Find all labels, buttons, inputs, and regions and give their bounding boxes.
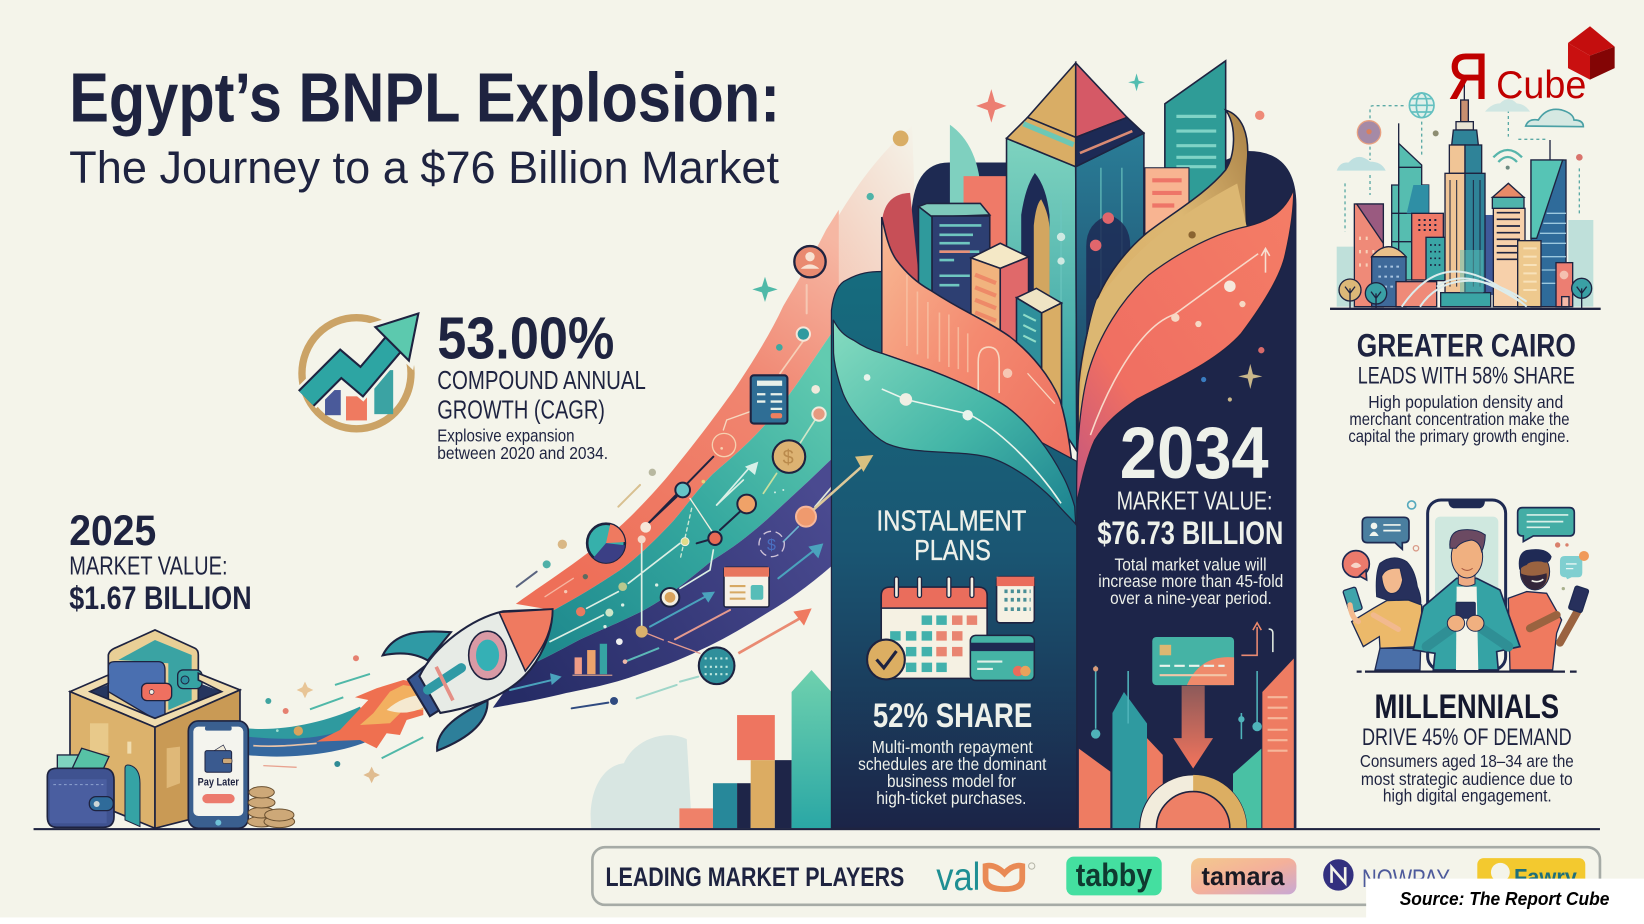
logo word: Cube xyxy=(1496,64,1586,107)
central tower panel xyxy=(814,61,1296,882)
people illustration xyxy=(1343,500,1589,672)
tower light lines xyxy=(1061,168,1122,419)
title: Egypt’s BNPL Explosion: xyxy=(69,59,780,137)
bottom bar chart xyxy=(591,670,831,828)
stat: 2025: MARKET VALUE: xyxy=(69,551,228,581)
stat: 2034: 2034 xyxy=(1120,412,1269,494)
dome building xyxy=(1372,247,1406,307)
coin stack xyxy=(248,787,295,828)
icon: check badge xyxy=(867,640,905,679)
red cube xyxy=(1568,26,1615,80)
logo: valU xyxy=(936,856,1035,899)
bearded man xyxy=(1508,549,1589,670)
half gauge xyxy=(1139,774,1248,828)
market players bar xyxy=(592,847,1600,905)
logo: tamara: tamara xyxy=(1202,861,1285,891)
woman xyxy=(1343,558,1422,670)
stat: instalment plans: high-ticket purchases. xyxy=(876,788,1026,808)
navy right panel xyxy=(1077,151,1296,828)
lower trail nodes xyxy=(576,483,816,645)
rocket window xyxy=(469,631,506,679)
central skyscraper xyxy=(1445,80,1485,293)
upper nodes xyxy=(649,327,826,493)
icon: card in right panel xyxy=(1152,637,1234,685)
exhaust dashes xyxy=(310,674,423,758)
logo: fawry: Fawry xyxy=(1514,864,1577,890)
icon: mesh globe xyxy=(699,647,734,684)
stat: Greater Cairo: LEADS WITH 58% SHARE xyxy=(1358,362,1575,389)
stat: CAGR xyxy=(437,305,646,463)
stat: instalment plans: PLANS xyxy=(914,534,991,566)
bearded man phone xyxy=(1568,586,1589,613)
tower left face xyxy=(1007,138,1077,451)
wallet in box xyxy=(108,630,202,719)
exhaust: blue stream xyxy=(247,733,377,757)
blue back block xyxy=(1485,215,1493,295)
tower sparkles xyxy=(867,73,1264,402)
central man jacket xyxy=(1413,578,1520,670)
icon: dollar coin xyxy=(773,440,805,473)
stat: CAGR: Explosive expansion xyxy=(437,425,575,445)
stat: Greater Cairo: merchant concentration make the xyxy=(1349,409,1570,429)
navy band xyxy=(493,457,839,708)
button xyxy=(202,794,235,803)
stat: CAGR: 53.00% xyxy=(437,305,614,372)
connection lines xyxy=(1345,106,1579,232)
tower right face xyxy=(1076,133,1144,451)
plaza blocks xyxy=(1396,250,1491,307)
icon bars xyxy=(325,370,393,420)
people ground line xyxy=(1357,668,1577,675)
small teal gold building xyxy=(1016,288,1062,404)
tower pyramid coral xyxy=(1076,63,1127,137)
stat: 2034: $76.73 BILLION xyxy=(1097,515,1283,551)
stat: instalment plans xyxy=(858,504,1047,808)
teal block xyxy=(1426,237,1445,281)
icon: wifi xyxy=(1493,150,1522,170)
rocket upper fin xyxy=(383,631,451,661)
rocket side strut xyxy=(428,668,461,690)
teal right tower xyxy=(1165,61,1226,231)
rocket nozzle xyxy=(408,661,461,716)
rising arrow xyxy=(306,313,418,398)
logo letter: Я xyxy=(1448,40,1489,113)
skyline base line xyxy=(1330,308,1601,310)
logo: tabby: tabby xyxy=(1076,857,1152,893)
coral triangle building xyxy=(1354,204,1383,307)
logo: fawry xyxy=(1477,858,1585,894)
bearded man beard xyxy=(1521,573,1547,590)
phone backdrop xyxy=(1428,500,1506,670)
woman hands xyxy=(1350,605,1398,629)
stat: 2034: over a nine-year period. xyxy=(1110,588,1272,608)
small floating dots xyxy=(1408,501,1569,590)
rocket xyxy=(383,609,553,751)
gold-roof building xyxy=(1492,183,1525,307)
central man arms xyxy=(1427,627,1508,647)
tower arch xyxy=(1021,173,1050,362)
stat: Millennials: Consumers aged 18–34 are the xyxy=(1360,751,1574,771)
stat: CAGR: GROWTH (CAGR) xyxy=(437,394,605,424)
icon: globe xyxy=(1409,93,1434,118)
sparkle: mint xyxy=(752,277,778,302)
stat: Millennials xyxy=(1360,688,1574,806)
rocket tail stripe xyxy=(436,667,453,700)
coral band xyxy=(516,210,839,610)
central man phone xyxy=(1456,602,1475,618)
dots xyxy=(1433,130,1583,161)
stat: instalment plans: Multi-month repayment xyxy=(872,737,1033,757)
bearded man hair xyxy=(1519,549,1552,570)
white arrow head xyxy=(745,462,758,475)
coral small building xyxy=(1556,263,1573,307)
city skyline xyxy=(1330,80,1601,310)
stat: Greater Cairo: High population density and xyxy=(1368,392,1563,412)
stat: instalment plans: business model for xyxy=(887,771,1016,791)
stat: instalment plans: INSTALMENT xyxy=(877,504,1026,536)
trail chart upper section xyxy=(648,246,826,523)
blue arrow heads xyxy=(550,543,823,685)
bearded man head xyxy=(1520,553,1550,590)
stat: 2034: increase more than 45-fold xyxy=(1098,571,1283,591)
tower dark window arch xyxy=(1086,215,1130,356)
stat: Millennials: high digital engagement. xyxy=(1383,786,1552,806)
faint peach trail glow xyxy=(786,126,917,336)
arrow: gold rising into panel xyxy=(814,455,873,510)
bearded man arm xyxy=(1530,610,1578,643)
coral block xyxy=(1412,213,1443,280)
small wallet xyxy=(47,768,114,827)
icon: document xyxy=(751,375,787,424)
box left face xyxy=(70,692,155,828)
icon: credit card xyxy=(970,635,1034,680)
rocket lower fin xyxy=(437,700,488,751)
logo: tamara xyxy=(1191,858,1296,894)
central man hair xyxy=(1450,530,1485,552)
back navy arch xyxy=(911,163,1090,419)
source text: Source: The Report Cube xyxy=(1400,888,1609,909)
teal band xyxy=(519,330,839,671)
woman hair xyxy=(1376,558,1421,605)
cloud backdrop xyxy=(591,735,692,828)
mint back tower xyxy=(950,125,981,252)
icon: user badge xyxy=(794,246,826,277)
stat: CAGR: between 2020 and 2034. xyxy=(437,443,608,463)
logo: valU: val xyxy=(936,856,980,899)
speech bubble mint xyxy=(1518,508,1574,542)
lower trail dots xyxy=(543,480,705,705)
stat: Greater Cairo xyxy=(1348,327,1576,446)
exhaust details xyxy=(253,726,317,746)
stat: 2034 xyxy=(1097,412,1283,608)
ground line xyxy=(34,828,1600,830)
box details xyxy=(90,723,180,827)
woman jeans xyxy=(1375,648,1421,670)
central man xyxy=(1413,530,1520,670)
rocket nose cone xyxy=(499,609,553,671)
bar heading: LEADING MARKET PLAYERS xyxy=(605,861,904,892)
rocket body xyxy=(419,609,553,713)
stat: CAGR: COMPOUND ANNUAL xyxy=(437,365,646,395)
central man hands xyxy=(1447,615,1484,631)
stat: Millennials: DRIVE 45% OF DEMAND xyxy=(1362,724,1572,751)
upper trail lines xyxy=(648,285,815,523)
navy building left xyxy=(918,203,990,331)
icon: location pin xyxy=(1357,121,1381,144)
peach building xyxy=(1145,168,1189,246)
icon: calendar lock xyxy=(724,567,769,607)
woman torso xyxy=(1352,600,1422,648)
lower trail lines xyxy=(510,480,835,708)
exhaust: teal stream xyxy=(247,707,373,750)
CAGR icon xyxy=(302,313,418,429)
box interior xyxy=(90,667,222,718)
central man face xyxy=(1462,568,1473,570)
woman phone xyxy=(1343,587,1363,613)
exhaust pink dash xyxy=(263,766,297,767)
phone: Pay Later xyxy=(188,721,248,828)
dashed dollar coin: $ xyxy=(767,537,776,554)
main tower xyxy=(1007,63,1144,451)
mint glass tower xyxy=(1392,123,1429,280)
woman face xyxy=(1382,568,1403,593)
bar outline xyxy=(592,847,1600,905)
central man head xyxy=(1451,535,1483,578)
left teal panel xyxy=(831,272,1077,828)
mini wallet xyxy=(205,745,232,772)
coral back building xyxy=(964,176,1008,260)
rust back panel xyxy=(882,193,923,315)
stat: 2025: 2025 xyxy=(69,507,156,555)
journey trail: ribbon from rocket to tower xyxy=(493,126,917,708)
tower collar left xyxy=(1007,117,1076,167)
arrow: down into gauge xyxy=(1173,686,1213,769)
right coral ribbon xyxy=(1077,189,1294,503)
stat: 2025: $1.67 BILLION xyxy=(69,580,252,616)
cream building xyxy=(971,243,1029,362)
stat: 2025 xyxy=(69,507,252,616)
stat: Millennials: MILLENNIALS xyxy=(1375,688,1559,726)
speech bubble blue xyxy=(1362,517,1409,549)
left coral ribbon xyxy=(882,217,1075,506)
bearded man shirt xyxy=(1508,592,1562,670)
faint background blocks xyxy=(1337,220,1593,307)
icon: small calendar xyxy=(997,577,1034,623)
exhaust dots and sparkles xyxy=(265,655,380,783)
logo: NOWPAY xyxy=(1323,859,1450,893)
stat: instalment plans: schedules are the dominant xyxy=(858,754,1047,774)
flame xyxy=(317,680,425,748)
stat: Greater Cairo: capital the primary growth engine. xyxy=(1348,426,1570,446)
base cityscape: right panel xyxy=(1079,658,1294,828)
gold building xyxy=(1518,241,1541,307)
gold ribbon xyxy=(1078,110,1248,451)
central man tee xyxy=(1456,587,1478,670)
stat: 2034: Total market value will xyxy=(1115,554,1267,574)
mini bar chart xyxy=(572,644,612,675)
stat: 2034: MARKET VALUE: xyxy=(1117,486,1273,516)
subtitle: The Journey to a $76 Billion Market xyxy=(69,142,779,193)
box rim xyxy=(70,673,240,727)
wallet box, phone, coins and rocket exhaust xyxy=(47,630,425,828)
banknotes xyxy=(57,748,109,783)
stat: instalment plans: 52% SHARE xyxy=(873,697,1032,735)
pay later label: Pay Later xyxy=(198,777,240,789)
central man neck xyxy=(1458,570,1475,586)
trail chart lower section xyxy=(510,480,835,708)
icon: dollar coin: $ xyxy=(783,447,794,469)
right glass tower xyxy=(1531,140,1566,307)
arrow: thin coral up xyxy=(1241,623,1273,655)
icon: pie chart xyxy=(587,524,625,563)
trees xyxy=(1339,278,1592,308)
tower pyramid gold xyxy=(1028,63,1076,137)
arrow: coral rising xyxy=(738,608,812,653)
gold ring xyxy=(302,318,411,429)
speech bubble light xyxy=(1560,551,1589,579)
dashed dollar coin xyxy=(759,531,784,557)
stat: Millennials: most strategic audience due to xyxy=(1361,769,1573,789)
box right face xyxy=(155,690,240,828)
tower collar right xyxy=(1076,117,1144,167)
icon: calendar xyxy=(881,579,987,678)
logo: RCube xyxy=(1448,26,1615,113)
logo: NOWPAY: NOWPAY xyxy=(1362,865,1450,893)
bridge arcs xyxy=(1402,271,1527,307)
clouds xyxy=(1337,99,1583,171)
mint ribbon xyxy=(833,320,1076,524)
stat: Greater Cairo: GREATER CAIRO xyxy=(1357,327,1576,363)
speech bubble coral xyxy=(1343,551,1369,580)
source strip xyxy=(0,879,1644,924)
